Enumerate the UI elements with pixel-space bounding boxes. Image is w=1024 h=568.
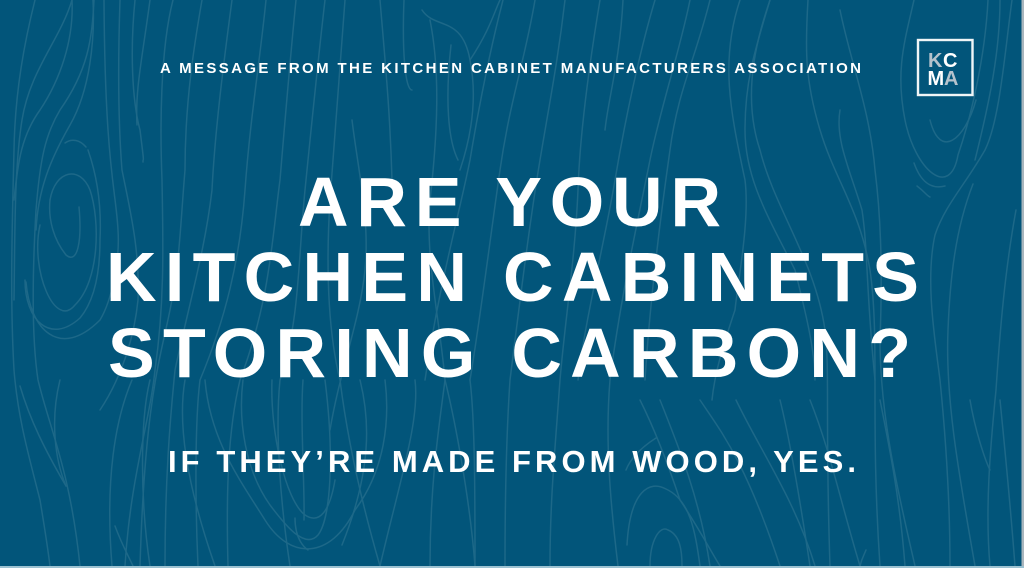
icon: KCMA logo: A — [944, 68, 958, 90]
title — [106, 163, 919, 392]
title: KITCHEN CABINETS — [106, 238, 919, 316]
icon: KCMA logo: M — [928, 68, 944, 90]
bottom edge strip — [0, 566, 1024, 568]
header message: A MESSAGE FROM THE KITCHEN CABINET MANUFACTURERS ASSOCIATION — [160, 60, 861, 77]
icon: KCMA logo: C — [943, 50, 957, 72]
icon: KCMA logo: K — [928, 50, 943, 72]
subtitle: IF THEY’RE MADE FROM WOOD, YES. — [168, 444, 856, 479]
title: ARE YOUR — [298, 163, 721, 241]
right edge strip — [1022, 0, 1024, 568]
title: STORING CARBON? — [108, 314, 911, 392]
icon: KCMA logo — [918, 40, 972, 95]
